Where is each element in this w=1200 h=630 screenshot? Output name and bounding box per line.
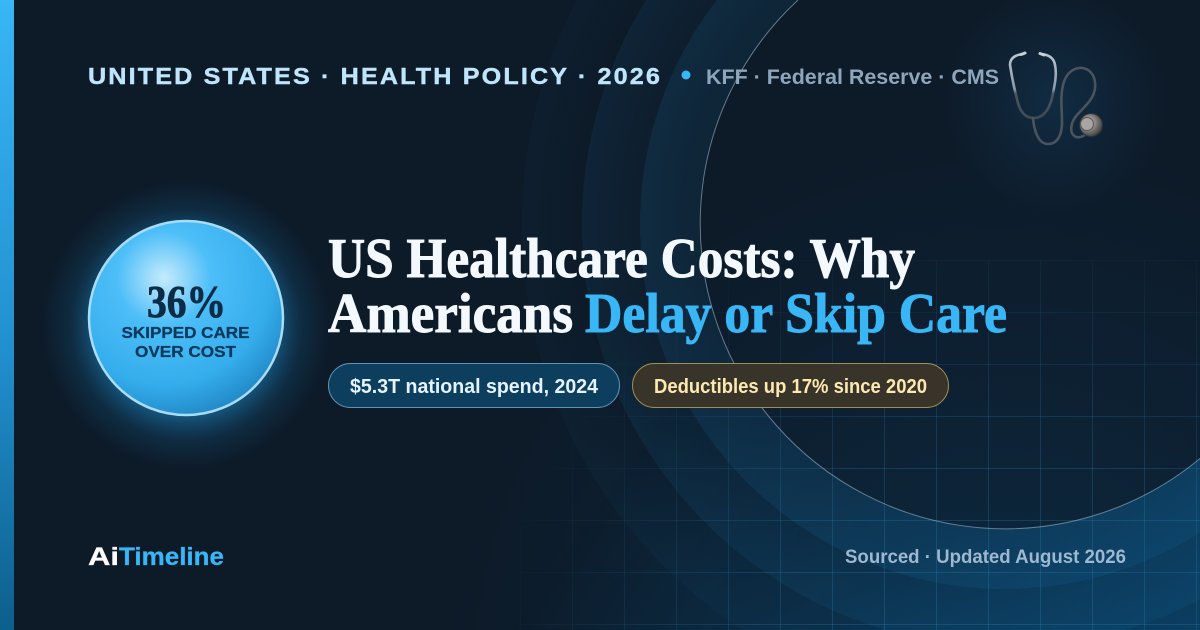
footer brand: Timeline [119, 543, 224, 571]
title [328, 228, 1007, 345]
pill: national spend: $5.3T national spend, 2024 [350, 375, 599, 398]
footer brand: Ai [88, 543, 119, 571]
badge value: 36% [147, 276, 226, 327]
footer update note: Sourced · Updated August 2026 [845, 546, 1126, 568]
title line 1: US Healthcare Costs: Why [328, 228, 915, 290]
stat badge glow [41, 180, 331, 470]
title line 2 accent: Delay or Skip Care [585, 283, 1007, 345]
concentric ring backdrop [558, 0, 1200, 630]
background grid [520, 260, 1200, 630]
title line 2 white: Americans [328, 283, 573, 345]
pill: national spend [328, 364, 620, 408]
pill: deductibles: Deductibles up 17% since 2020 [654, 375, 927, 398]
badge caption line 1: SKIPPED CARE [122, 325, 250, 342]
stethoscope glow [930, 0, 1180, 220]
pill: deductibles [632, 364, 948, 408]
left accent bar [0, 0, 14, 630]
icon: stethoscope [1010, 53, 1102, 144]
stat badge [89, 221, 283, 415]
header: separator dot [682, 70, 690, 80]
header: sources: KFF · Federal Reserve · CMS [706, 65, 999, 89]
thin ring outline [700, 0, 1200, 529]
header: topic line: UNITED STATES · HEALTH POLICY · 2026 [88, 63, 662, 89]
badge caption line 2: OVER COST [135, 344, 237, 361]
